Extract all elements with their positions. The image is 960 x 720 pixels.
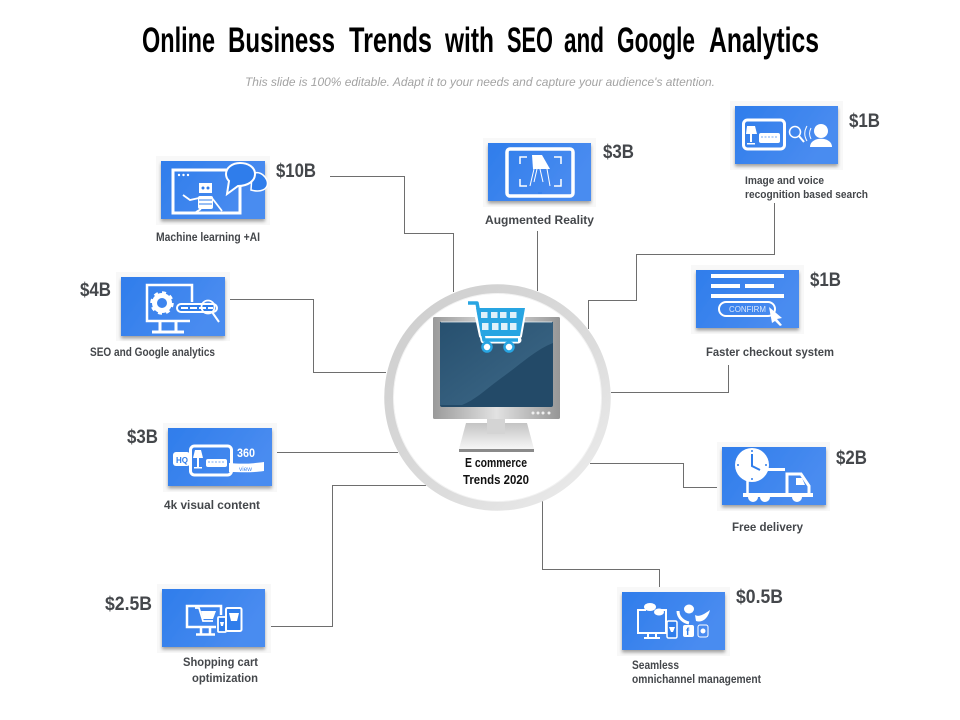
monitor bezel xyxy=(433,317,560,419)
icon: devices and social: f xyxy=(686,627,690,638)
title: SEO xyxy=(507,21,553,60)
value: $4B: $4B xyxy=(80,280,111,301)
connector lines xyxy=(228,176,774,626)
value: $3B top: $3B xyxy=(603,142,634,163)
screen top highlight xyxy=(441,321,552,323)
icon: HQ and 360 view xyxy=(173,446,264,475)
icon: HQ and 360 view: view xyxy=(239,466,252,473)
icon: shopping cart xyxy=(468,303,525,352)
value: $3B left: $3B xyxy=(127,427,158,448)
icon: clock truck xyxy=(735,448,813,502)
label: shopping cart optimization: Shopping cart xyxy=(183,655,258,669)
value: $1B top right: $1B xyxy=(849,111,880,132)
title: and xyxy=(564,21,604,60)
label: image and voice: Image and voice xyxy=(745,175,824,187)
label: machine learning: Machine learning +AI xyxy=(156,230,260,244)
value: $10B: $10B xyxy=(276,161,316,182)
icon: framed sofa, magnifier, voice, person xyxy=(744,120,832,149)
icon: gear monitor with search xyxy=(147,285,219,332)
panel: SEO xyxy=(116,272,230,341)
panel: image and voice search xyxy=(730,101,843,170)
label: omnichannel xyxy=(632,658,761,686)
panel: omnichannel xyxy=(617,587,730,656)
label: image and voice xyxy=(745,175,868,201)
monitor stand base xyxy=(459,418,534,452)
monitor buttons xyxy=(532,412,550,414)
label: shopping cart optimization: optimization xyxy=(192,671,258,685)
label: omnichannel: omnichannel management xyxy=(632,672,761,686)
panel: augmented reality xyxy=(483,138,596,207)
icon: tablet with chair xyxy=(507,149,573,196)
label: shopping cart optimization xyxy=(183,655,258,685)
panel: free delivery xyxy=(717,442,830,511)
title: Online xyxy=(142,21,215,60)
screen glare xyxy=(440,322,553,405)
panel: 4k visual content xyxy=(163,423,277,492)
icon: devices with carts xyxy=(187,606,242,634)
value: $2B: $2B xyxy=(836,448,867,469)
value: $1B right: $1B xyxy=(810,270,841,291)
monitor screen xyxy=(440,322,553,407)
label: 4k visual content: 4k visual content xyxy=(164,498,260,512)
panel: faster checkout xyxy=(691,265,804,334)
label: image and voice: recognition based search xyxy=(745,189,868,201)
panel: machine learning xyxy=(156,156,270,225)
label: free delivery: Free delivery xyxy=(732,520,803,534)
panel: shopping cart optimization xyxy=(157,584,271,653)
centre label xyxy=(463,456,529,487)
label: augmented reality: Augmented Reality xyxy=(485,213,594,227)
central ring xyxy=(389,289,606,506)
title: with xyxy=(444,21,494,60)
subtitle: This slide is 100% editable. Adapt it to your needs and capture your audience's attention. xyxy=(245,75,715,89)
title: Trends xyxy=(349,21,432,60)
value: $2.5B: $2.5B xyxy=(105,594,152,615)
icon: robot in browser with chat xyxy=(173,163,267,213)
value: $0.5B: $0.5B xyxy=(736,587,783,608)
label: omnichannel: Seamless xyxy=(632,658,679,672)
label: SEO: SEO and Google analytics xyxy=(90,345,215,359)
title: Analytics xyxy=(709,21,819,60)
label: faster checkout: Faster checkout system xyxy=(706,345,834,359)
title xyxy=(142,21,819,60)
title: Google xyxy=(617,21,695,60)
icon: HQ and 360 view: HQ xyxy=(176,456,188,465)
centre label: E commerce xyxy=(465,456,527,470)
central monitor xyxy=(433,317,560,452)
icon: HQ and 360 view: 360 xyxy=(237,448,255,460)
title: Business xyxy=(228,21,335,60)
centre label: Trends 2020 xyxy=(463,473,529,487)
icon: form and confirm button: CONFIRM xyxy=(729,305,766,314)
